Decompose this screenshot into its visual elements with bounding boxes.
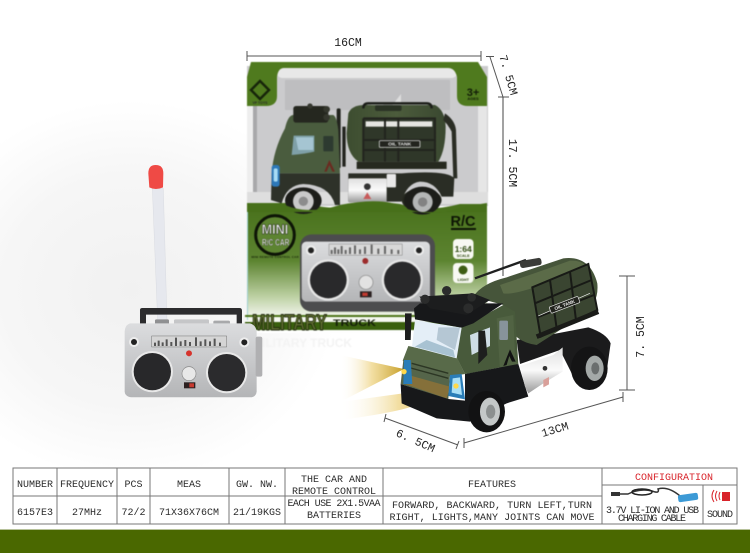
- door emblem: [503, 349, 516, 366]
- 1:64 scale badge: 1:64: [455, 244, 472, 254]
- cable label: 3.7V LI-ION AND USB: [606, 506, 699, 517]
- column: features: FORWARD, BACKWARD, TURN LEFT,TURN: [392, 501, 592, 512]
- column: meas: [159, 480, 219, 519]
- dimension: truck height 7.5CM: [619, 276, 648, 390]
- box lower panel: [247, 202, 487, 333]
- green wave over wheels: [247, 201, 487, 213]
- military truck band: [245, 315, 470, 330]
- packaged remote: [300, 234, 435, 312]
- box age badge: 3+: [467, 87, 479, 99]
- dimension: truck length 13CM: 13CM: [540, 420, 570, 441]
- guard rack: [532, 264, 597, 337]
- tank: [473, 258, 598, 345]
- column: pcs: PCS: [124, 480, 143, 491]
- column: features: [390, 480, 594, 524]
- grille: [401, 360, 450, 399]
- roof rack: [419, 293, 490, 315]
- dimension: truck length 13CM: [464, 392, 623, 448]
- R/C logo: R/C: [451, 214, 476, 230]
- top pipe and cap: [475, 260, 526, 278]
- cable label: CHARGING CABLE: [618, 514, 686, 525]
- column: batteries: [288, 475, 380, 522]
- remote body: [125, 323, 257, 397]
- package box: [245, 62, 488, 350]
- tank label: [549, 296, 580, 313]
- light badge: [453, 263, 474, 283]
- box window interior: [247, 66, 488, 206]
- column: number: 6157E3: [17, 508, 53, 519]
- handle: [140, 308, 242, 325]
- box age badge: AGES: [467, 96, 479, 101]
- roof: [414, 303, 503, 328]
- dimension: truck width 6.5CM: 6. 5CM: [393, 427, 437, 456]
- column: frequency: 27MHz: [72, 508, 102, 519]
- column: frequency: FREQUENCY: [60, 480, 114, 491]
- packaged truck: OIL TANK: [388, 142, 412, 148]
- column: frequency: [60, 480, 114, 519]
- soft background shade: [0, 100, 340, 480]
- icon: sound: [712, 490, 730, 502]
- column: number: NUMBER: [17, 480, 53, 491]
- dimension: height 17.5CM: 17. 5CM: [505, 139, 518, 187]
- front wheel: [468, 391, 505, 432]
- light badge: LIGHT: [458, 278, 470, 282]
- box left corner logo: VP TOYS: [252, 101, 268, 105]
- dimension: truck height 7.5CM: 7. 5CM: [635, 316, 648, 358]
- packaged truck: [271, 103, 457, 215]
- center controls: [186, 350, 192, 356]
- column: meas: MEAS: [177, 480, 201, 491]
- specification table: [13, 468, 737, 525]
- rear chassis and wheel: [517, 327, 611, 377]
- column: batteries: EACH USE 2X1.5VAA: [288, 499, 380, 510]
- column: features: RIGHT, LIGHTS,MANY JOINTS CAN MOVE: [390, 513, 594, 524]
- mini r/c car badge: [251, 216, 300, 259]
- cable label: [606, 506, 699, 525]
- military truck title: MILITARY: [252, 310, 327, 335]
- mini r/c car badge: MINI: [262, 221, 288, 237]
- lower bumper: [401, 364, 528, 422]
- column: number: [17, 480, 53, 519]
- tank label: OIL TANK: [554, 299, 576, 311]
- column: meas: 71X36X76CM: [159, 508, 219, 519]
- icon: charging cable and battery: [611, 488, 698, 502]
- dimension: truck width 6.5CM: [384, 414, 459, 456]
- remote control: [125, 165, 262, 397]
- 1:64 scale badge: [453, 239, 474, 259]
- side windows and mirrors: [470, 327, 490, 355]
- antenna: [148, 165, 167, 321]
- headlight beams: [340, 355, 457, 420]
- 1:64 scale badge: SCALE: [457, 254, 470, 258]
- configuration heading: CONFIGURATION: [635, 473, 713, 484]
- speakers: [132, 351, 173, 392]
- dimension: depth 7.5CM: 7. 5CM: [495, 54, 519, 97]
- box left corner logo: [247, 77, 277, 106]
- sound label: SOUND: [707, 510, 733, 521]
- title reflection: MILITARY TRUCK: [252, 336, 352, 350]
- display: [152, 336, 227, 347]
- toy truck: [401, 257, 611, 432]
- fuel tank: [520, 347, 563, 393]
- column: batteries: REMOTE CONTROL: [292, 487, 376, 498]
- box top flap: [247, 62, 487, 77]
- headlights: [401, 360, 465, 399]
- column: pcs: 72/2: [121, 507, 146, 519]
- military truck title: TRUCK: [333, 318, 377, 328]
- column: batteries: THE CAR AND: [301, 475, 367, 486]
- small knobs: [129, 337, 139, 347]
- column: weight: GW. NW.: [236, 480, 278, 491]
- cab side: [457, 305, 518, 374]
- cab front: [403, 346, 465, 377]
- mini r/c car badge: R/C CAR: [262, 237, 290, 247]
- column: features: FEATURES: [468, 480, 516, 491]
- mini r/c car badge: MINI REMOTE CONTROL CAR: [251, 255, 300, 259]
- column: batteries: BATTERIES: [307, 511, 361, 522]
- windshield: [412, 320, 462, 358]
- column: weight: [233, 480, 281, 519]
- dimension: width 16CM: [247, 37, 481, 61]
- column: pcs: [121, 480, 146, 519]
- footer band: [0, 529, 750, 553]
- column: weight: 21/19KGS: [233, 507, 281, 519]
- dimension: width 16CM: 16CM: [334, 37, 362, 50]
- box age badge: [457, 77, 487, 106]
